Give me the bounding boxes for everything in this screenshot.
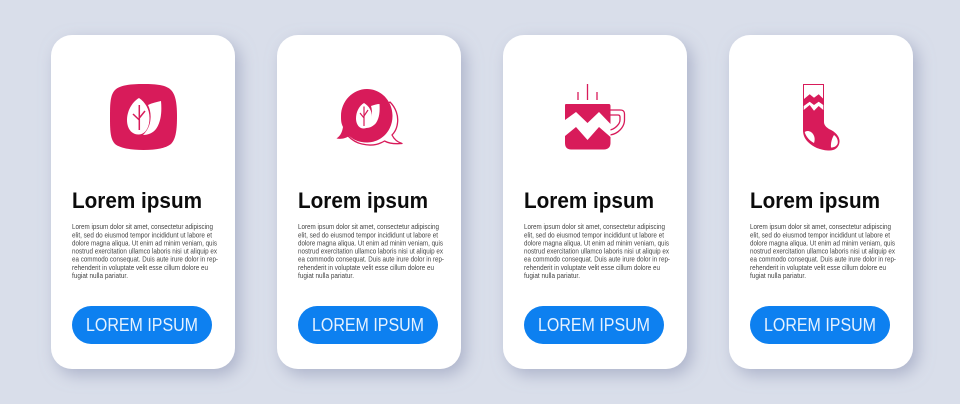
body text: dolore magna aliqua. Ut enim ad minim veniam, quis [72, 240, 217, 248]
body text: nostrud exercitation ullamco laboris nisi ut aliquip ex [524, 248, 669, 256]
body text: Lorem ipsum dolor sit amet, consectetur adipiscing [72, 223, 213, 231]
panel: card 2 [277, 35, 461, 369]
body text: rehenderit in voluptate velit esse cillum dolore eu [298, 264, 434, 272]
body text: fugiat nulla pariatur. [750, 272, 806, 280]
heading: Lorem ipsum [298, 188, 428, 213]
body text [72, 223, 219, 280]
panel: card 3 [503, 35, 687, 369]
button [298, 306, 438, 344]
body text [524, 223, 671, 280]
body text: ea commodo consequat. Duis aute irure dolor in rep- [298, 256, 445, 264]
body text: Lorem ipsum dolor sit amet, consectetur adipiscing [524, 223, 665, 231]
body text: elit, sed do eiusmod tempor incididunt ut labore et [298, 232, 438, 240]
button [524, 306, 664, 344]
body text: nostrud exercitation ullamco laboris nisi ut aliquip ex [72, 248, 217, 256]
body text: rehenderit in voluptate velit esse cillum dolore eu [750, 264, 886, 272]
body text [750, 223, 897, 280]
body text: dolore magna aliqua. Ut enim ad minim veniam, quis [298, 240, 443, 248]
icon: striped sock [803, 84, 840, 151]
heading: Lorem ipsum [72, 188, 202, 213]
button: LOREM IPSUM [538, 315, 650, 335]
body text [298, 223, 445, 280]
heading: Lorem ipsum [750, 188, 880, 213]
body text: Lorem ipsum dolor sit amet, consectetur adipiscing [298, 223, 439, 231]
body text: fugiat nulla pariatur. [298, 272, 354, 280]
body text: dolore magna aliqua. Ut enim ad minim veniam, quis [750, 240, 895, 248]
body text: elit, sed do eiusmod tempor incididunt ut labore et [524, 232, 664, 240]
button: LOREM IPSUM [312, 315, 424, 335]
body text: fugiat nulla pariatur. [72, 272, 128, 280]
body text: fugiat nulla pariatur. [524, 272, 580, 280]
body text: Lorem ipsum dolor sit amet, consectetur adipiscing [750, 223, 891, 231]
body text: rehenderit in voluptate velit esse cillum dolore eu [524, 264, 660, 272]
body text: dolore magna aliqua. Ut enim ad minim veniam, quis [524, 240, 669, 248]
heading: Lorem ipsum [524, 188, 654, 213]
icon: steaming mug [565, 84, 624, 150]
icon: leaf in speech bubbles [336, 89, 402, 145]
icon: leaf in rounded square [110, 84, 177, 150]
button: LOREM IPSUM [764, 315, 876, 335]
body text: nostrud exercitation ullamco laboris nisi ut aliquip ex [750, 248, 895, 256]
body text: elit, sed do eiusmod tempor incididunt ut labore et [72, 232, 212, 240]
body text: elit, sed do eiusmod tempor incididunt ut labore et [750, 232, 890, 240]
body text: rehenderit in voluptate velit esse cillum dolore eu [72, 264, 208, 272]
button [750, 306, 890, 344]
button: LOREM IPSUM [86, 315, 198, 335]
panel: card 4 [729, 35, 913, 369]
panel: card 1 [51, 35, 235, 369]
body text: nostrud exercitation ullamco laboris nisi ut aliquip ex [298, 248, 443, 256]
body text: ea commodo consequat. Duis aute irure dolor in rep- [524, 256, 671, 264]
body text: ea commodo consequat. Duis aute irure dolor in rep- [750, 256, 897, 264]
body text: ea commodo consequat. Duis aute irure dolor in rep- [72, 256, 219, 264]
button [72, 306, 212, 344]
